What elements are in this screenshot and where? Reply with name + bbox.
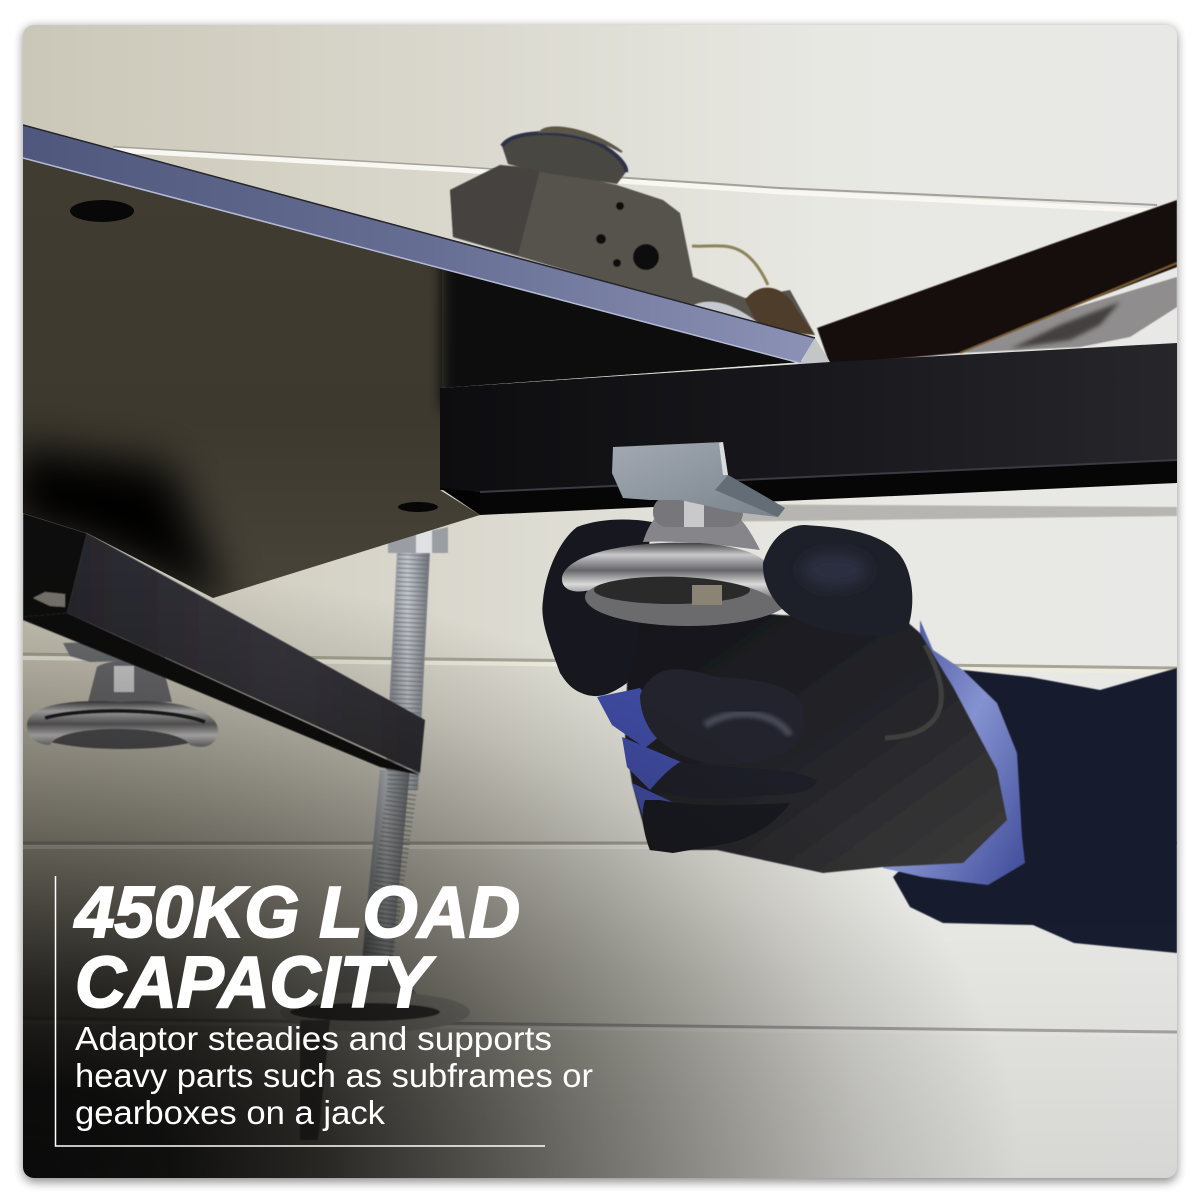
lower clamp behind rod <box>280 958 470 1140</box>
index finger <box>640 669 804 764</box>
small clamp, left <box>27 640 218 749</box>
finger highlights <box>705 714 790 735</box>
heading <box>73 873 520 1023</box>
frame line <box>56 876 545 1146</box>
description: heavy parts such as subframes or <box>75 1057 593 1094</box>
heading: 450KG LOAD <box>73 873 520 953</box>
finger blue strips <box>597 688 682 816</box>
description: gearboxes on a jack <box>75 1094 386 1131</box>
ring finger <box>643 800 790 853</box>
main clamp disc <box>562 497 791 626</box>
thumb highlight <box>801 552 869 588</box>
description <box>75 1020 593 1131</box>
glove cuff <box>883 620 1025 885</box>
middle finger <box>650 762 817 798</box>
sleeve <box>893 668 1177 953</box>
description: Adaptor steadies and supports <box>75 1020 552 1057</box>
left knuckle <box>542 519 652 696</box>
glove and sleeve <box>542 519 1177 953</box>
threaded rod <box>362 527 448 960</box>
suspension block <box>450 127 815 335</box>
rear arm <box>817 200 1177 365</box>
plate holes <box>70 200 134 222</box>
bottom soft fade <box>23 1028 1177 1178</box>
thumb <box>762 525 912 624</box>
adaptor plate <box>10 125 830 610</box>
heading: CAPACITY <box>75 943 436 1023</box>
plate shading <box>10 240 820 610</box>
glove palm <box>625 600 1007 873</box>
sliding T-nut <box>612 442 785 517</box>
box beam <box>440 343 1177 515</box>
wrist seam <box>885 645 941 738</box>
bushing <box>502 133 626 184</box>
cross bar <box>23 513 425 775</box>
bottom-left dark fade <box>23 596 982 1178</box>
